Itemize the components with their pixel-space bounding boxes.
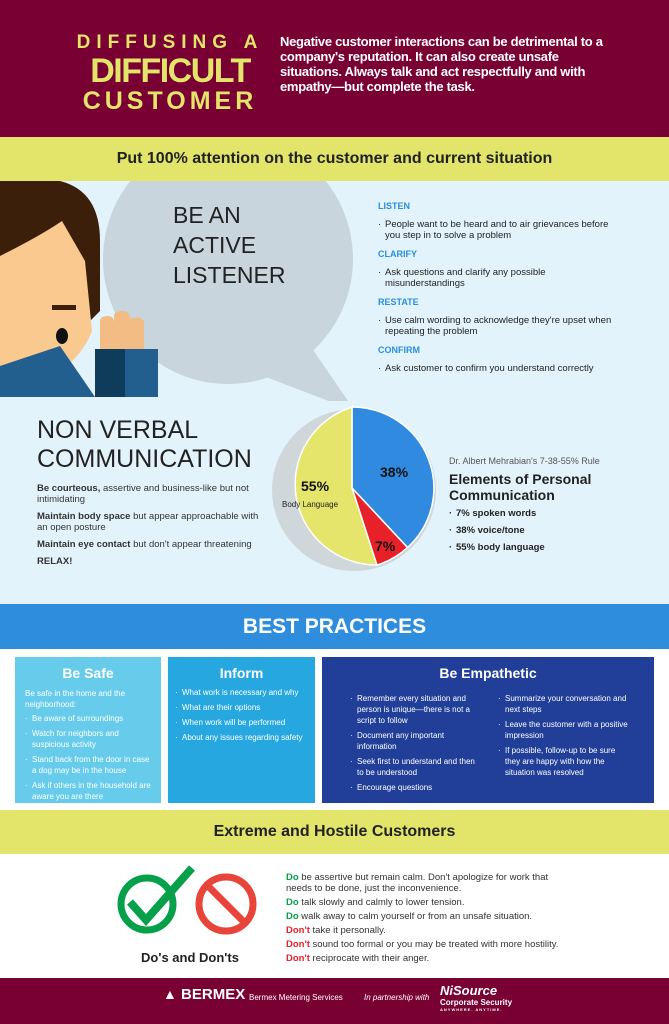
non verbal tips: Maintain body space but appear approachable with an open posture bbox=[37, 511, 258, 533]
pie chart: Body Language bbox=[282, 500, 339, 509]
listening steps: CONFIRM bbox=[378, 345, 420, 355]
panel: be empathetic: Document any important information bbox=[357, 731, 444, 751]
listening steps: People want to be heard and to air grievances before you step in to solve a problem bbox=[385, 219, 608, 241]
yellow band: attention bbox=[0, 137, 669, 181]
logo: nisource: Corporate Security bbox=[440, 998, 512, 1007]
non verbal tips: Maintain eye contact but don't appear threatening bbox=[37, 539, 252, 550]
pie chart: 55% bbox=[301, 478, 330, 494]
pie chart: 7% bbox=[375, 538, 396, 554]
dos and donts list: Do talk slowly and calmly to lower tension. bbox=[286, 897, 464, 908]
panel: be safe: Ask if others in the household are aware you are there bbox=[32, 781, 151, 801]
panel: be safe: Be safe in the home and the neighborhood: bbox=[25, 689, 125, 709]
panel: be empathetic: Be Empathetic bbox=[439, 665, 537, 681]
panel: inform bbox=[168, 657, 315, 803]
footer bbox=[0, 978, 669, 1024]
illustration: listening person bbox=[0, 181, 158, 397]
listening steps: Ask questions and clarify any possible misunderstandings bbox=[385, 267, 546, 289]
panel: be empathetic: Leave the customer with a positive impression bbox=[505, 720, 628, 740]
panel: inform: When work will be performed bbox=[182, 718, 285, 727]
dos and donts list: Don't reciprocate with their anger. bbox=[286, 953, 429, 964]
logo: nisource: NiSource bbox=[440, 983, 497, 998]
text: bermex metering: Bermex Metering Services bbox=[249, 993, 343, 1002]
pie chart bbox=[272, 406, 436, 571]
non verbal tips bbox=[37, 483, 258, 567]
logo: nisource: ANYWHERE. ANYTIME. bbox=[440, 1007, 503, 1012]
logo: bermex: ▲ BERMEX bbox=[163, 986, 245, 1003]
heading: non verbal communication bbox=[37, 416, 252, 473]
listening steps bbox=[378, 201, 611, 374]
dos and donts list: Don't sound too formal or you may be treated with more hostility. bbox=[286, 939, 558, 950]
panel: inform: Inform bbox=[220, 665, 263, 681]
panel: be empathetic bbox=[322, 657, 654, 803]
best practices banner: BEST PRACTICES bbox=[243, 615, 426, 638]
pie chart: 38% bbox=[380, 464, 409, 480]
logo: nisource bbox=[440, 983, 512, 1012]
listening steps: Use calm wording to acknowledge they're upset when repeating the problem bbox=[385, 315, 611, 337]
panel: be safe: Be Safe bbox=[62, 665, 114, 681]
elements of communication: Elements of Personal Communication bbox=[449, 471, 591, 503]
panel: be safe: Watch for neighbors and suspicious activity bbox=[32, 729, 119, 749]
heading: be an active listener: LISTENER bbox=[173, 262, 285, 288]
heading: non verbal communication: NON VERBAL bbox=[37, 416, 198, 444]
panel: be empathetic: Seek first to understand and then to be understood bbox=[357, 757, 475, 777]
listening steps: Ask customer to confirm you understand correctly bbox=[385, 363, 594, 374]
title: CUSTOMER bbox=[83, 87, 257, 115]
panel: inform: What are their options bbox=[182, 703, 260, 712]
listening steps: LISTEN bbox=[378, 201, 410, 211]
non verbal tips: Be courteous, assertive and business-like but not intimidating bbox=[37, 483, 249, 505]
title: DIFFUSING A bbox=[77, 32, 263, 53]
panel: be safe: Be aware of surroundings bbox=[32, 714, 123, 723]
title bbox=[77, 32, 263, 115]
dos and donts list: Do be assertive but remain calm. Don't apologize for work that needs to be done, just the inconvenience. bbox=[286, 872, 548, 894]
elements of communication: 55% body language bbox=[456, 542, 545, 553]
header band bbox=[0, 0, 669, 137]
dos and donts list: Do walk away to calm yourself or from an unsafe situation. bbox=[286, 911, 532, 922]
heading: be an active listener bbox=[173, 202, 285, 288]
panel: be empathetic: Summarize your conversation and next steps bbox=[505, 694, 626, 714]
panel: be safe bbox=[15, 657, 161, 803]
yellow band: extreme customers: Extreme and Hostile Customers bbox=[214, 823, 455, 840]
label: dos and donts: Do's and Don'ts bbox=[141, 950, 239, 965]
panel: be safe: Stand back from the door in case a dog may be in the house bbox=[32, 755, 149, 775]
dos and donts list bbox=[286, 872, 558, 964]
best practices banner bbox=[0, 604, 669, 649]
elements of communication: 7% spoken words bbox=[456, 508, 536, 519]
text: partnership: In partnership with bbox=[364, 993, 429, 1002]
speech bubble bbox=[103, 181, 353, 401]
listening steps: RESTATE bbox=[378, 297, 419, 307]
title: DIFFICULT bbox=[90, 52, 250, 90]
panel: be empathetic: Encourage questions bbox=[357, 783, 432, 792]
icons: check and no bbox=[118, 865, 256, 934]
panel: be empathetic: If possible, follow-up to be sure they are happy with how the situation was resolved bbox=[505, 746, 615, 777]
panel: inform: What work is necessary and why bbox=[182, 688, 298, 697]
non verbal tips: RELAX! bbox=[37, 556, 72, 567]
heading: be an active listener: ACTIVE bbox=[173, 232, 256, 258]
elements of communication: Dr. Albert Mehrabian's 7-38-55% Rule bbox=[449, 456, 600, 466]
dos and donts list: Don't take it personally. bbox=[286, 925, 386, 936]
listening steps: CLARIFY bbox=[378, 249, 417, 259]
heading: non verbal communication: COMMUNICATION bbox=[37, 445, 252, 473]
panel: inform: About any issues regarding safety bbox=[182, 733, 303, 742]
yellow band: extreme customers bbox=[0, 810, 669, 854]
elements of communication: 38% voice/tone bbox=[456, 525, 525, 536]
yellow band: attention: Put 100% attention on the customer and current situation bbox=[117, 150, 552, 167]
heading: be an active listener: BE AN bbox=[173, 202, 241, 228]
elements of communication bbox=[449, 456, 600, 553]
intro text: Negative customer interactions can be detrimental to a company's reputation. It can also create unsafe situations. Always talk and act respectfully and with empathy—but complete the task. bbox=[280, 34, 603, 94]
panel: be empathetic: Remember every situation and person is unique—there is not a script to follow bbox=[357, 694, 470, 725]
